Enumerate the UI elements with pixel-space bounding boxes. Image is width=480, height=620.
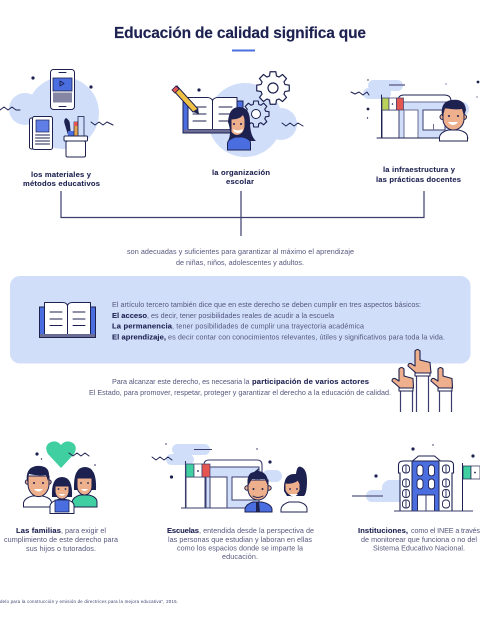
icon: raised hands — [392, 350, 452, 412]
text: schools: Escuelas — [167, 526, 199, 535]
aspects text: El artículo tercero también dice que en este derecho se deben cumplir en tres aspectos básicos: — [112, 300, 421, 309]
illustration: schools — [152, 443, 307, 512]
connector bracket — [61, 191, 424, 236]
label: infrastructure: las prácticas docentes — [376, 175, 461, 184]
text: institutions — [358, 526, 480, 552]
aspects text: El aprendizaje, — [112, 332, 166, 342]
label: school organization: la organización — [212, 168, 270, 177]
intro text — [127, 247, 354, 267]
icon: heart — [46, 441, 76, 468]
aspects text: , es decir, tener posibilidades reales de acudir a la escuela — [147, 311, 334, 320]
label: infrastructure: la infraestructura y — [383, 165, 456, 174]
aspects text: El acceso — [112, 311, 147, 320]
illustration: educational materials — [0, 70, 113, 157]
text: families: sus hijos o tutorados. — [26, 544, 96, 553]
label: materials: métodos educativos — [23, 179, 100, 188]
text: families: Las familias — [16, 526, 61, 535]
text: schools: como los espacios donde se imparte la — [177, 544, 303, 552]
footnote: delo para la construcción y emisión de directrices para la mejora educativa", 2015. — [0, 599, 178, 604]
label: infrastructure — [376, 165, 461, 184]
aspects text: La permanencia — [112, 322, 173, 330]
icon: open book — [40, 302, 96, 338]
text: schools — [167, 526, 314, 561]
aspects text: es decir contar con conocimientos relevantes, útiles y significativos para toda la vida. — [168, 332, 445, 342]
label: materials: los materiales y — [31, 170, 92, 179]
text: schools: , entendida desde la perspectiva de — [199, 526, 314, 535]
text: families — [4, 526, 118, 553]
text: families: , para exigir el — [61, 526, 106, 535]
label: materials — [23, 170, 100, 188]
illustration: institutions — [352, 444, 480, 511]
illustration: infrastructure and teaching — [351, 79, 479, 141]
illustration: school organization — [172, 72, 303, 157]
text: institutions: como el INEE a través — [411, 526, 480, 535]
actors text: El Estado, para promover, respetar, proteger y garantizar el derecho a la educación de calidad. — [89, 388, 391, 397]
aspects text — [112, 300, 445, 342]
text: institutions: Instituciones, — [358, 526, 408, 535]
title underline — [232, 50, 255, 52]
text: families: cumplimiento de este derecho para — [4, 535, 118, 544]
panel: three aspects — [10, 276, 470, 364]
intro text: de niñas, niños, adolescentes y adultos. — [176, 258, 304, 267]
intro text: son adecuadas y suficientes para garantizar al máximo el aprendizaje — [127, 247, 354, 256]
illustration: family — [24, 441, 97, 514]
text: schools: educación. — [222, 552, 258, 561]
text: institutions: de monitorear que funciona o no del — [361, 535, 477, 544]
label: school organization — [212, 168, 270, 186]
actors text: Para alcanzar este derecho, es necesaria la — [112, 377, 250, 386]
text: schools: las personas que estudian y laboran en ellas — [168, 535, 312, 544]
actors text — [89, 377, 391, 397]
aspects text: , tener posibilidades de cumplir una trayectoria académica — [172, 322, 364, 330]
label: school organization: escolar — [226, 177, 254, 186]
title: Educación de calidad significa que — [114, 25, 366, 42]
actors text: participación de varios actores — [252, 377, 369, 386]
text: institutions: Sistema Educativo Nacional. — [373, 544, 465, 552]
